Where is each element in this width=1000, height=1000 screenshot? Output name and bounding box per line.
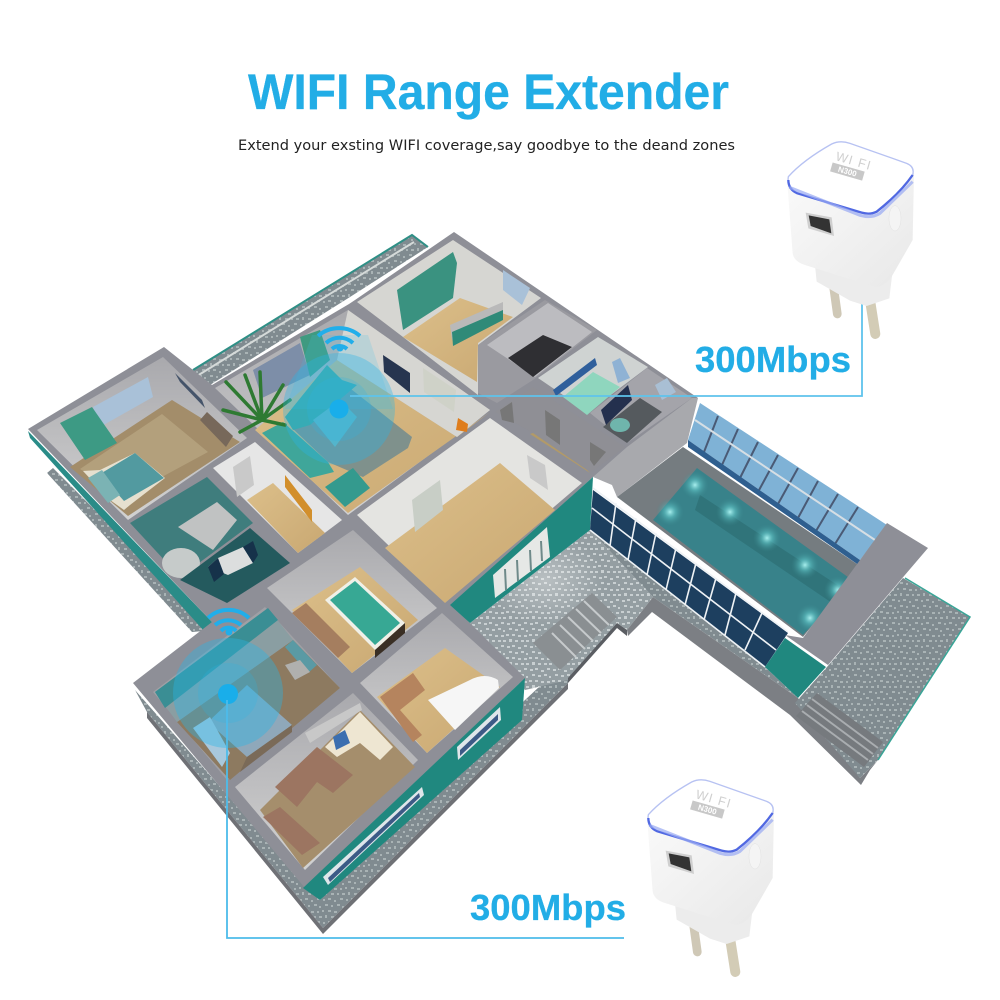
room: living room bbox=[215, 310, 490, 515]
icon: wifi bottom bbox=[208, 610, 249, 636]
pool end wall bbox=[765, 523, 928, 698]
left room bbox=[153, 607, 340, 780]
device top bbox=[787, 142, 914, 334]
signal overlay bottom bbox=[173, 638, 283, 748]
building walls bbox=[28, 232, 698, 888]
sofa bbox=[285, 365, 357, 430]
device top: N300 bbox=[837, 165, 858, 179]
speed label bottom: 300Mbps bbox=[470, 887, 626, 928]
device top: WI FI bbox=[834, 149, 874, 173]
device bottom: WI FI bbox=[694, 787, 734, 811]
title: WIFI Range Extender bbox=[248, 64, 729, 120]
room: hallway bbox=[213, 442, 342, 553]
room: bathroom bbox=[538, 337, 648, 415]
room: laundry bbox=[130, 477, 253, 578]
connector line bottom bbox=[227, 700, 624, 938]
rug bbox=[292, 382, 412, 477]
pool area bbox=[617, 403, 887, 637]
terraces bbox=[28, 235, 970, 934]
device bottom: N300 bbox=[697, 803, 718, 817]
device bottom bbox=[647, 780, 774, 972]
room: bedroom bbox=[37, 357, 247, 520]
pool wall bbox=[593, 398, 698, 497]
room: closet bbox=[478, 300, 597, 403]
room: kitchen bbox=[357, 240, 541, 395]
speed label top: 300Mbps bbox=[695, 339, 851, 380]
room: main hall bbox=[357, 418, 582, 603]
teal exterior walls bbox=[303, 477, 593, 900]
connector line top bbox=[350, 300, 862, 396]
pool glass front bbox=[590, 488, 788, 667]
icon: wifi top bbox=[318, 328, 360, 352]
room: billiard bbox=[267, 530, 437, 673]
room: piano bbox=[360, 613, 513, 753]
floor plan bbox=[28, 232, 970, 934]
subtitle: Extend your exsting WIFI coverage,say goodbye to the deand zones bbox=[238, 138, 735, 154]
room: washroom bbox=[180, 528, 290, 603]
room: utility hall bbox=[495, 387, 625, 473]
signal overlay top bbox=[283, 335, 395, 465]
room: toilet bbox=[590, 368, 692, 443]
room: study lounge bbox=[235, 693, 418, 870]
plant bbox=[223, 372, 290, 432]
